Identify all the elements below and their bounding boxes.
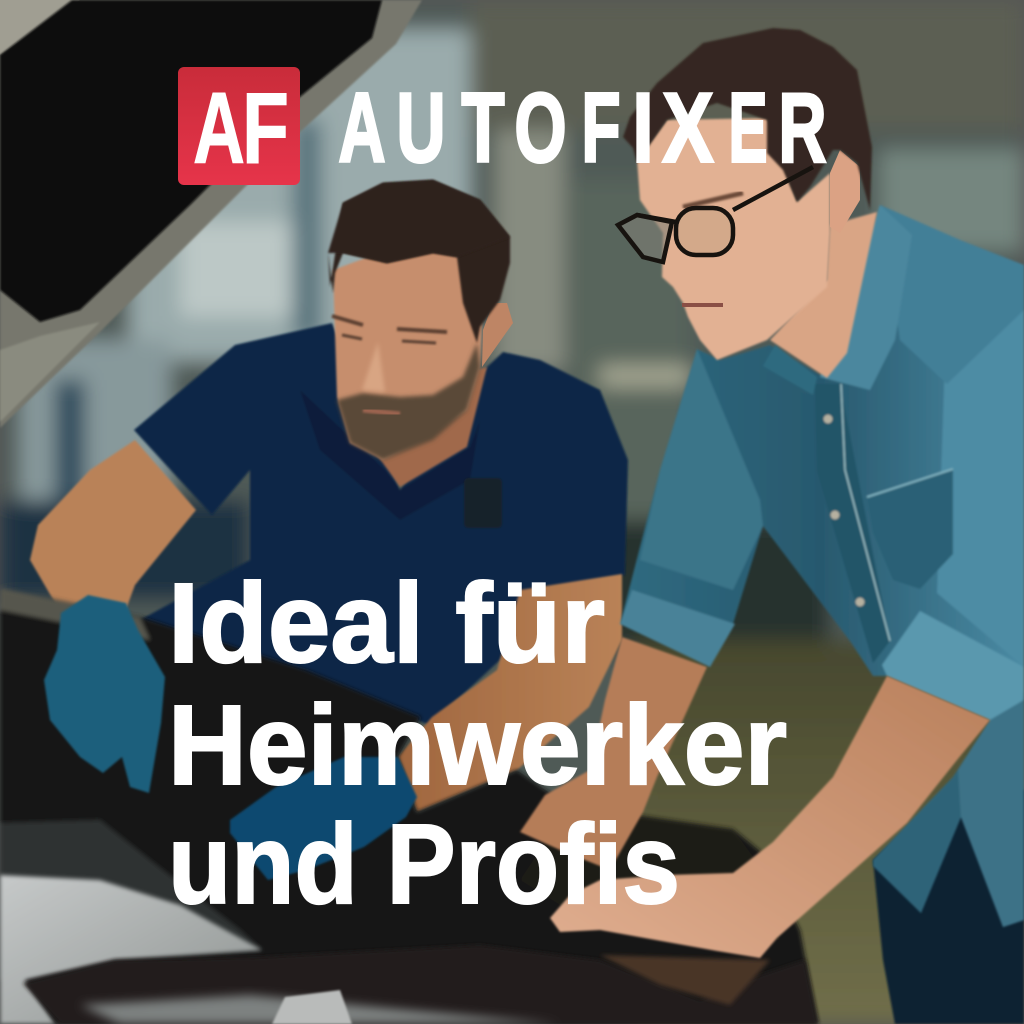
- mechanic: right forearm: [398, 574, 622, 812]
- logo: wordmark: O: [514, 72, 566, 182]
- headline: Ideal für: [168, 560, 605, 686]
- mechanic: neck and head: [328, 180, 513, 487]
- customer: denim shirt: [620, 205, 1024, 927]
- logo: AF badge: A: [193, 73, 245, 185]
- mechanic: left arm: [30, 440, 196, 620]
- headline: Heimwerker: [168, 682, 787, 808]
- car hood: [0, 0, 422, 428]
- car: silver wing and bumper: [0, 875, 818, 1024]
- logo: wordmark: I: [632, 72, 654, 182]
- logo: wordmark: T: [462, 72, 504, 182]
- headline: und Profis: [168, 801, 680, 927]
- logo: AF badge: [178, 67, 300, 185]
- customer: left forearm and hand: [520, 637, 707, 870]
- logo: AF badge: F: [242, 73, 289, 185]
- logo: wordmark: [338, 72, 826, 182]
- logo: wordmark: R: [778, 72, 826, 182]
- logo: wordmark: U: [396, 72, 446, 182]
- customer: head: [618, 28, 877, 378]
- engine bay: [0, 588, 818, 1024]
- mechanic: blue gloves: [44, 595, 417, 880]
- logo: wordmark: F: [582, 72, 620, 182]
- logo: wordmark: X: [662, 72, 714, 182]
- mechanic: navy polo shirt: [134, 323, 628, 725]
- customer: right forearm and hand: [550, 676, 990, 958]
- customer: trousers: [873, 790, 1024, 1024]
- icon: glasses: [618, 167, 813, 262]
- logo: wordmark: A: [338, 72, 386, 182]
- logo: wordmark: E: [728, 72, 768, 182]
- headline: [168, 560, 787, 927]
